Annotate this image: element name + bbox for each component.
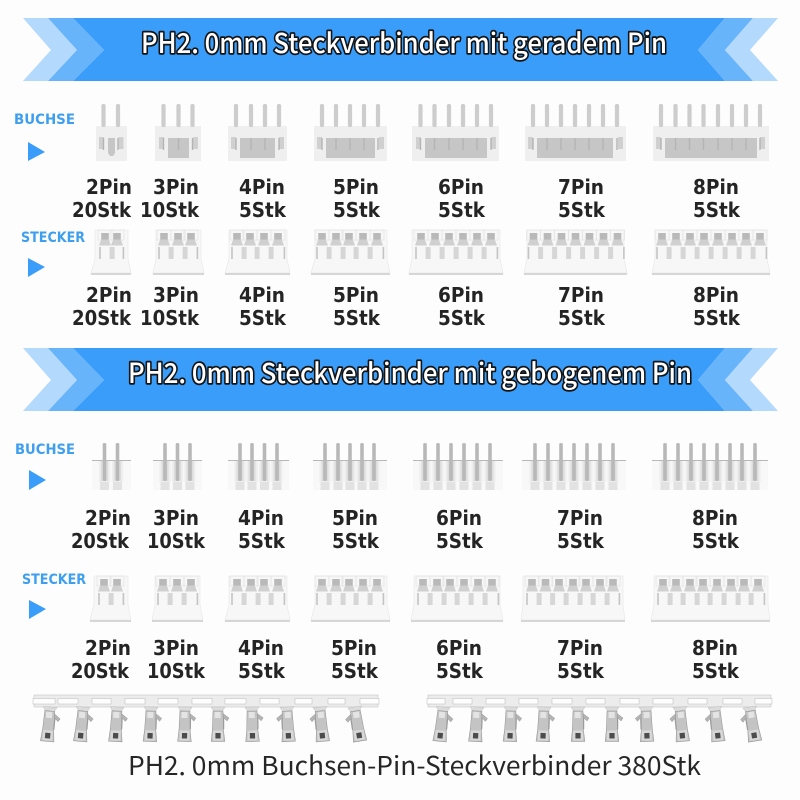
labels row 4: 5Stk (331, 659, 379, 683)
labels row 1: 6Pin (438, 175, 484, 199)
labels row 4 (71, 636, 740, 683)
labels row 2: 6Pin (438, 283, 484, 307)
labels row 3: 5Stk (238, 529, 286, 553)
labels row 1: 20Stk (72, 198, 132, 222)
labels row 1: 8Pin (693, 175, 739, 199)
housing: 6 pin (411, 576, 503, 622)
labels row 2: 4Pin (239, 283, 285, 307)
housing: 2 pin (90, 576, 131, 622)
labels row 2: 5Pin (333, 283, 379, 307)
connector row 4: housings (90, 576, 770, 622)
labels row 2: 7Pin (558, 283, 604, 307)
labels row 2 (72, 283, 741, 330)
labels row 2: 5Stk (558, 306, 606, 330)
labels row 2: 2Pin (86, 283, 132, 307)
labels row 2: 20Stk (72, 306, 132, 330)
label: BUCHSE row 1 (14, 112, 75, 161)
labels row 3: 5Stk (557, 529, 605, 553)
labels row 1 (72, 175, 741, 222)
labels row 1: 7Pin (558, 175, 604, 199)
heading: gebogener Pin: PH2. 0mm Steckverbinder mit gebogenem Pin (128, 351, 692, 391)
housing: 4 pin (225, 230, 290, 275)
labels row 3: 5Pin (332, 506, 378, 530)
housing: 3 pin (153, 230, 204, 275)
labels row 4: 6Pin (436, 636, 482, 660)
label: STECKER row 2 (21, 230, 85, 277)
icon: arrow (28, 142, 45, 161)
labels row 1: 4Pin (239, 175, 285, 199)
labels row 4: 7Pin (557, 636, 603, 660)
connector: 5 pin header (314, 104, 387, 161)
labels row 1: 5Stk (438, 198, 486, 222)
labels row 1: 5Stk (239, 198, 287, 222)
connector row 2: housings (91, 230, 770, 275)
housing: 7 pin (521, 576, 625, 622)
labels row 1: 5Stk (558, 198, 606, 222)
label: STECKER row 2: STECKER (21, 230, 85, 246)
labels row 3: 6Pin (436, 506, 482, 530)
labels row 4: 5Stk (557, 659, 605, 683)
labels row 4: 8Pin (692, 636, 738, 660)
connector row 3: bent pin headers (92, 443, 768, 490)
footer text: PH2. 0mm Buchsen-Pin-Steckverbinder 380Stk (128, 746, 702, 783)
labels row 2: 5Stk (438, 306, 486, 330)
housing: 3 pin (152, 576, 203, 622)
heading: gerader Pin: PH2. 0mm Steckverbinder mit geradem Pin (141, 21, 667, 61)
labels row 2: 5Stk (239, 306, 287, 330)
connector row 1: straight pin headers (96, 104, 769, 161)
labels row 4: 10Stk (147, 659, 206, 683)
terminal strip: left (33, 695, 379, 743)
label: STECKER row 4 (22, 572, 86, 619)
labels row 1: 2Pin (86, 175, 132, 199)
connector: 4 pin bent (228, 443, 289, 490)
labels row 2: 5Stk (333, 306, 381, 330)
labels row 3: 2Pin (85, 506, 131, 530)
labels row 1: 10Stk (140, 198, 200, 222)
labels row 3: 10Stk (147, 529, 206, 553)
labels row 4: 5Stk (238, 659, 286, 683)
labels row 2: 8Pin (693, 283, 739, 307)
housing: 2 pin (91, 230, 131, 275)
housing: 5 pin (311, 230, 390, 275)
labels row 1: 5Stk (693, 198, 741, 222)
labels row 4: 4Pin (238, 636, 284, 660)
housing: 7 pin (524, 230, 627, 275)
labels row 3: 7Pin (557, 506, 603, 530)
labels row 3: 8Pin (692, 506, 738, 530)
labels row 3: 5Stk (436, 529, 484, 553)
label: BUCHSE row 1: BUCHSE (14, 112, 75, 128)
labels row 3: 4Pin (238, 506, 284, 530)
connector: 6 pin bent (413, 443, 503, 490)
labels row 2: 5Stk (693, 306, 741, 330)
housing: 6 pin (409, 230, 503, 275)
terminal strip: right (427, 695, 772, 743)
connector: 8 pin bent (652, 443, 768, 490)
labels row 3 (71, 506, 740, 553)
banner: gebogener Pin (23, 348, 778, 411)
connector: 8 pin header (653, 104, 769, 161)
connector: 7 pin bent (522, 443, 626, 490)
labels row 3: 20Stk (71, 529, 130, 553)
labels row 3: 5Stk (332, 529, 380, 553)
labels row 3: 3Pin (153, 506, 199, 530)
labels row 4: 5Stk (692, 659, 740, 683)
housing: 8 pin (652, 230, 770, 275)
label: STECKER row 4: STECKER (22, 572, 86, 588)
labels row 4: 5Pin (331, 636, 377, 660)
labels row 2: 10Stk (140, 306, 200, 330)
labels row 4: 3Pin (153, 636, 199, 660)
connector: 3 pin header (155, 104, 201, 161)
icon: arrow (29, 470, 46, 490)
icon: arrow (28, 258, 45, 277)
label: BUCHSE row 3: BUCHSE (15, 442, 75, 458)
label: BUCHSE row 3 (15, 442, 75, 490)
housing: 5 pin (311, 576, 390, 622)
labels row 1: 5Stk (333, 198, 381, 222)
banner: gerader Pin (23, 18, 778, 81)
connector: 4 pin header (228, 104, 287, 161)
labels row 1: 5Pin (333, 175, 379, 199)
labels row 4: 2Pin (85, 636, 131, 660)
connector: 3 pin bent (153, 443, 202, 490)
labels row 4: 20Stk (71, 659, 130, 683)
labels row 2: 3Pin (153, 283, 199, 307)
housing: 4 pin (225, 576, 290, 622)
connector: 7 pin header (525, 104, 626, 161)
connector: 2 pin bent (92, 443, 131, 490)
connector: 5 pin bent (313, 443, 387, 490)
connector: 2 pin header (96, 104, 127, 161)
connector: 6 pin header (412, 104, 499, 161)
labels row 3: 5Stk (692, 529, 740, 553)
labels row 4: 5Stk (436, 659, 484, 683)
icon: arrow (29, 600, 46, 619)
labels row 1: 3Pin (153, 175, 199, 199)
housing: 8 pin (651, 576, 770, 622)
